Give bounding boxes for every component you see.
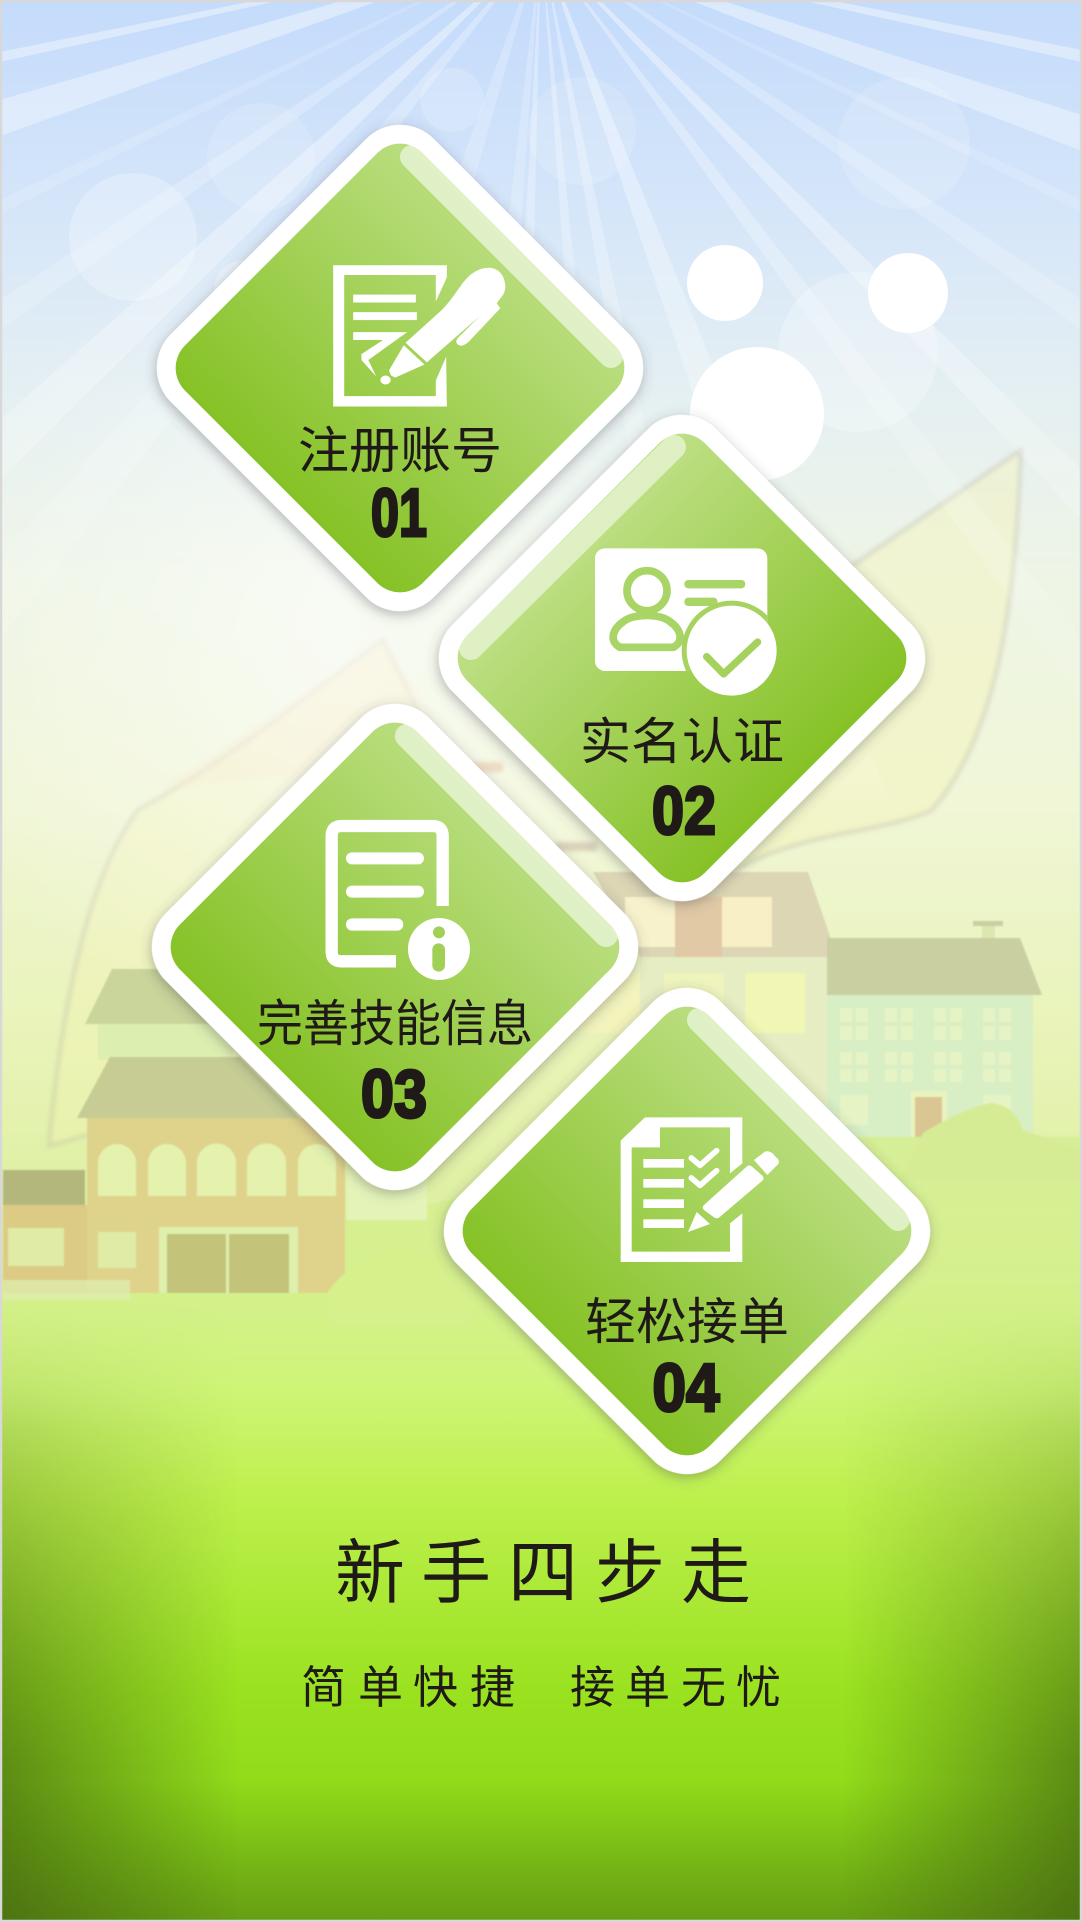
icon: document and pen <box>333 265 505 407</box>
number 01: 01 <box>371 475 427 551</box>
number 03: 03 <box>361 1056 427 1132</box>
label: 实名认证: 实名认证 <box>580 714 784 770</box>
label: 完善技能信息: 完善技能信息 <box>257 996 533 1052</box>
icon: ID card with check <box>595 548 782 701</box>
number 02: 02 <box>652 773 716 849</box>
background: houses <box>0 872 1082 1430</box>
number 04: 04 <box>652 1350 720 1426</box>
label: 注册账号: 注册账号 <box>298 423 502 479</box>
diamond 2: real-name verification <box>432 412 930 910</box>
diamond 3: complete skill info <box>132 684 658 1210</box>
house: front left <box>3 1057 477 1325</box>
diamond 4: take orders easily <box>424 968 950 1494</box>
light glow behind diamonds <box>0 200 800 1060</box>
diamond 1: register account <box>137 105 663 631</box>
sun rays <box>0 0 1082 800</box>
title: 新手四步走 <box>335 1534 751 1612</box>
house: centre <box>580 872 837 1137</box>
house: back left <box>85 969 240 1060</box>
subtitle right: 接单无忧 <box>570 1662 781 1713</box>
icon: document with info badge <box>332 826 470 980</box>
house: right <box>827 921 1082 1180</box>
background: kite <box>49 450 1021 1146</box>
label: 轻松接单: 轻松接单 <box>585 1294 789 1350</box>
subtitle left: 简单快捷 <box>301 1662 515 1713</box>
icon: checklist with pencil <box>621 1117 779 1262</box>
bokeh circles <box>69 68 970 481</box>
ground <box>0 1137 1082 1430</box>
